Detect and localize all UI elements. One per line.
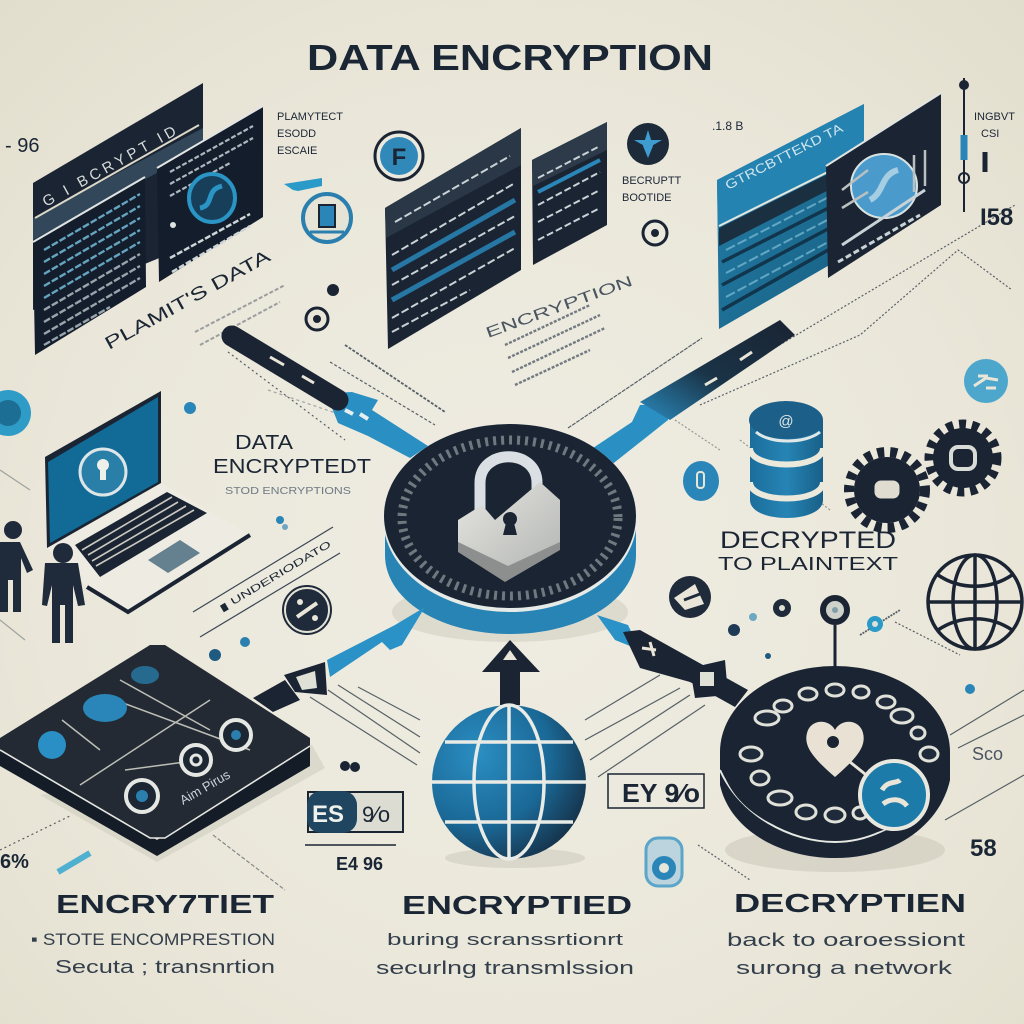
label: side numbers: Sco: [972, 744, 1003, 764]
label: side numbers: 58: [970, 835, 997, 862]
label: right top: INGBVT: [974, 111, 1015, 123]
caption: encrypted left: [31, 889, 275, 977]
label: mid-left banner: [193, 527, 340, 637]
arrow: globe to lock: [482, 640, 540, 705]
label: data encrypted: DATA: [235, 432, 294, 454]
label: data encrypted: STOD ENCRYPTIONS: [225, 486, 351, 497]
padlock: [458, 457, 560, 582]
icon: vertical connector nodes: [959, 78, 985, 212]
icon: database: [749, 401, 823, 518]
panel: decryption disc (bottom right): [720, 666, 950, 872]
label: ES percent: ES: [312, 801, 344, 828]
icon: ring small: [306, 308, 328, 330]
icon: people: [0, 521, 85, 643]
label: ES percent: [307, 791, 403, 833]
icon: small lock mark: [643, 221, 667, 245]
label: side numbers: [0, 744, 1003, 873]
label: EY percent: [608, 774, 704, 808]
label: right top: [712, 111, 1015, 231]
screen: encrypted narrow: [532, 122, 607, 265]
caption: decryption right: back to oaroessiont: [727, 930, 965, 950]
label: right top: I58: [980, 204, 1013, 231]
icon: globe right: [928, 555, 1022, 649]
label: decrypted to plaintext: DECRYPTED: [720, 527, 896, 554]
title: DATA ENCRYPTION: [307, 37, 713, 78]
label: right top: .1.8 B: [712, 119, 743, 133]
label: plaintext data: [101, 246, 285, 353]
label: data encrypted: [213, 432, 371, 497]
screen: long document: G I BCRYPT ID: [40, 123, 179, 210]
label: decrypted to plaintext: TO PLAINTEXT: [718, 554, 898, 574]
icon: pin above disc: [823, 598, 847, 680]
screen: encrypted rows: [385, 128, 521, 349]
label: small stat: [305, 845, 396, 874]
icon: globe center: [432, 705, 586, 868]
arrow: board to lock: [253, 607, 425, 712]
screen: dial: [826, 93, 941, 278]
icon: dot badge: [683, 461, 719, 501]
icon: left edge badge: [0, 390, 31, 436]
caption: encrypted left: ▪ STOTE ENCOMPRESTION: [31, 930, 275, 949]
icon: gears: [849, 424, 997, 528]
label: plaintext data: PLAMIT'S DATA: [101, 246, 274, 353]
icon: central lock disc: [383, 424, 637, 642]
icon: scattered dots: [58, 284, 975, 872]
panel: decrypted screens (top right): [717, 93, 941, 329]
caption: decryption right: DECRYPTIEN: [734, 888, 966, 918]
screen: blue document: [717, 104, 864, 329]
caption: encrypted left: ENCRY7TIET: [56, 889, 274, 919]
screen: long document: [33, 83, 203, 355]
label: ES percent: 9⁄o: [362, 802, 390, 827]
icon: percent badge: [283, 586, 331, 634]
label: decrypt small: [622, 175, 682, 204]
icon: dot marks: [184, 402, 288, 530]
caption: decryption right: surong a network: [736, 958, 954, 978]
label: decrypted to plaintext: [718, 527, 898, 574]
icon: central left arm: [232, 336, 428, 458]
panel: circuit board (bottom left): Aim Pirus: [177, 767, 233, 808]
label: side numbers: 6%: [0, 851, 29, 873]
caption: encrypted left: Secuta ; transnrtion: [55, 957, 275, 977]
panel: plaintext screens (top left): [33, 83, 263, 355]
label: mid-left banner: ▮ UNDERIODATO: [218, 539, 334, 615]
label: small stat: E4 96: [336, 854, 383, 874]
icon: database: @: [778, 413, 794, 430]
label: right top: CSI: [981, 128, 999, 140]
arrow: lock to decrypt disc: [597, 615, 748, 707]
icon: star badge: [627, 123, 669, 165]
caption: encrypted center: securlng transmlssion: [376, 958, 634, 978]
label: plaintext small: ESCAIE: [277, 145, 317, 157]
label: decrypt small: BOOTIDE: [622, 192, 672, 204]
icon: small key badge: F: [392, 144, 406, 171]
label: encryption description: [484, 273, 635, 385]
label: EY percent: EY 9⁄o: [622, 778, 700, 808]
caption: encrypted center: ENCRYPTIED: [402, 890, 632, 920]
panel: circuit board (bottom left): [0, 645, 325, 862]
icon: small circle left of pin: [669, 576, 711, 618]
label: left percent: - 96: [5, 135, 39, 157]
icon: teal link badge: [964, 359, 1008, 403]
caption: decryption right: [727, 888, 966, 978]
label: plaintext small: [277, 111, 343, 157]
label: plaintext small: ESODD: [277, 128, 316, 140]
label: encryption description: ENCRYPTION: [484, 273, 635, 342]
caption: encrypted center: buring scranssrtionrt: [387, 930, 623, 949]
screen: blue document: GTRCBTTEKD TA: [723, 120, 846, 193]
screen: encrypted data tablet: [157, 106, 263, 282]
icon: padlock small: [646, 838, 682, 886]
label: decrypt small: BECRUPTT: [622, 175, 682, 187]
caption: encrypted center: [376, 890, 634, 978]
icon: laptop: [45, 391, 250, 612]
label: data encrypted: ENCRYPTEDT: [213, 456, 371, 478]
icon: arrow and shield badge: [284, 178, 351, 242]
icon: central right arm: [590, 320, 795, 466]
panel: middle screens (top center): [385, 122, 607, 349]
icon: small key badge: [375, 132, 423, 180]
label: plaintext small: PLAMYTECT: [277, 111, 343, 123]
